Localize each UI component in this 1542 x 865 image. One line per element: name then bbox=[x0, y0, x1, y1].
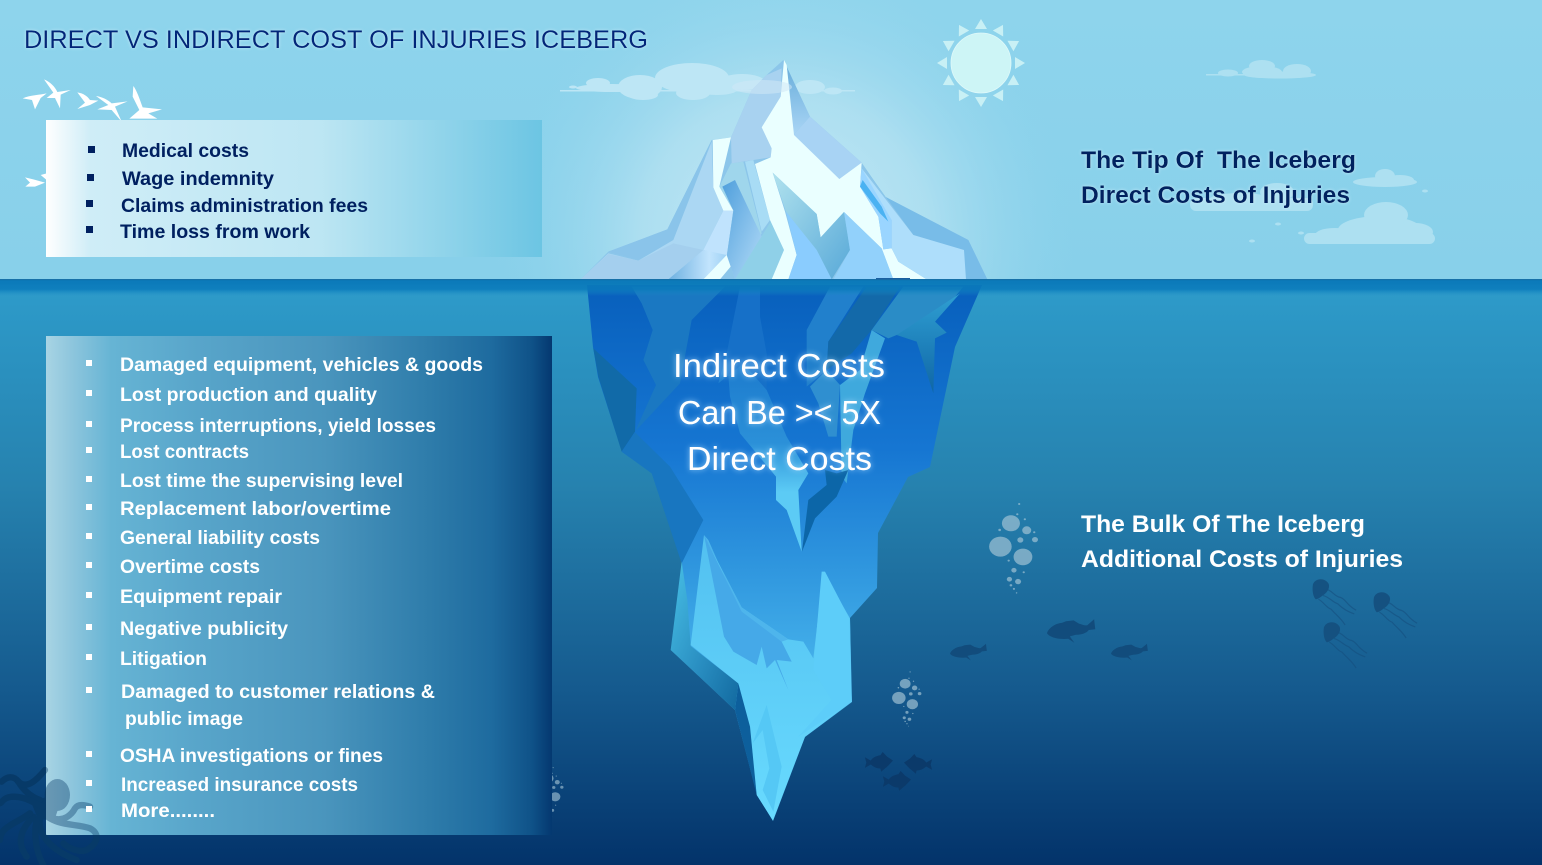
bullet list: indirect costs bbox=[86, 354, 483, 822]
title: DIRECT VS INDIRECT COST OF INJURIES ICEBERG bbox=[24, 26, 648, 54]
heading: bulk of the iceberg bbox=[1081, 511, 1403, 573]
heading: tip of the iceberg: Direct Costs of Injuries bbox=[1081, 182, 1350, 209]
panel: direct costs bbox=[46, 120, 542, 257]
heading: tip of the iceberg bbox=[1081, 147, 1356, 209]
iceberg facets lower bbox=[671, 535, 852, 820]
bullet list: indirect costs: Lost production and quality bbox=[120, 384, 377, 406]
icon: octopus bbox=[0, 770, 97, 865]
bubbles: right large bbox=[989, 503, 1038, 594]
panel: indirect costs bbox=[46, 336, 552, 835]
callout: indirect costs multiplier bbox=[673, 347, 885, 477]
bullet list: direct costs: Medical costs bbox=[122, 140, 249, 162]
bullet list: direct costs: Time loss from work bbox=[120, 221, 310, 243]
icon: large fish bbox=[1047, 619, 1095, 643]
bullet list: indirect costs: Increased insurance costs bbox=[121, 774, 358, 796]
callout: indirect costs multiplier: Can Be >< 5X bbox=[678, 394, 881, 431]
callout: indirect costs multiplier: Direct Costs bbox=[687, 440, 872, 477]
bullet list: indirect costs: Litigation bbox=[120, 648, 207, 670]
cloud: right large lower bbox=[1249, 202, 1435, 244]
cloud: behind iceberg peak bbox=[560, 63, 855, 100]
bullet list: indirect costs: Process interruptions, yield losses bbox=[120, 415, 436, 437]
cloud overlap on peak bbox=[732, 80, 792, 94]
bullet list: indirect costs: More........ bbox=[121, 800, 215, 822]
heading: bulk of the iceberg: The Bulk Of The Iceberg bbox=[1081, 511, 1365, 538]
callout: indirect costs multiplier: Indirect Costs bbox=[673, 347, 885, 384]
bullet list: indirect costs: General liability costs bbox=[120, 527, 320, 549]
heading: bulk of the iceberg: Additional Costs of Injuries bbox=[1081, 546, 1403, 573]
icon: fish left bbox=[950, 644, 987, 660]
bullet list: indirect costs: Damaged to customer relations & bbox=[121, 681, 435, 703]
bullet list: indirect costs: Equipment repair bbox=[120, 586, 282, 608]
ocean background bbox=[0, 279, 1542, 865]
bullet list: direct costs: Claims administration fees bbox=[121, 195, 368, 217]
bullet list: indirect costs: OSHA investigations or fines bbox=[120, 745, 383, 767]
iceberg facets upper bbox=[593, 287, 963, 563]
bubbles: behind panel edge bbox=[537, 767, 564, 817]
cloud: right small top bbox=[1206, 60, 1316, 78]
bullet list: indirect costs: public image bbox=[125, 708, 243, 730]
icon: small fish school bbox=[865, 752, 932, 791]
heading: tip of the iceberg: The Tip Of The Iceberg bbox=[1081, 147, 1356, 174]
icon: birds bbox=[23, 79, 162, 187]
icon: fish right bbox=[1111, 644, 1148, 660]
bullet list: indirect costs: Lost time the supervising level bbox=[120, 470, 403, 492]
bullet list: direct costs: Wage indemnity bbox=[122, 168, 274, 190]
bullet list: indirect costs: Lost contracts bbox=[120, 441, 249, 463]
bubbles: mid small bbox=[892, 671, 921, 727]
bullet list: indirect costs: Replacement labor/overtime bbox=[120, 498, 391, 520]
icon: sun bbox=[937, 19, 1025, 107]
iceberg: above water tip bbox=[581, 60, 987, 279]
water surface band bbox=[0, 278, 1542, 296]
bullet list: indirect costs: Damaged equipment, vehicles & goods bbox=[120, 354, 483, 376]
bullet list: indirect costs: Overtime costs bbox=[120, 556, 260, 578]
bullet list: direct costs bbox=[86, 140, 368, 243]
sky background bbox=[0, 0, 1542, 280]
iceberg: submerged bulk bbox=[587, 285, 982, 821]
cloud: behind right label bbox=[1190, 183, 1313, 211]
bullet list: indirect costs: Negative publicity bbox=[120, 618, 288, 640]
cloud: mid right bbox=[1353, 169, 1428, 192]
icon: jellyfish group bbox=[1313, 579, 1417, 668]
